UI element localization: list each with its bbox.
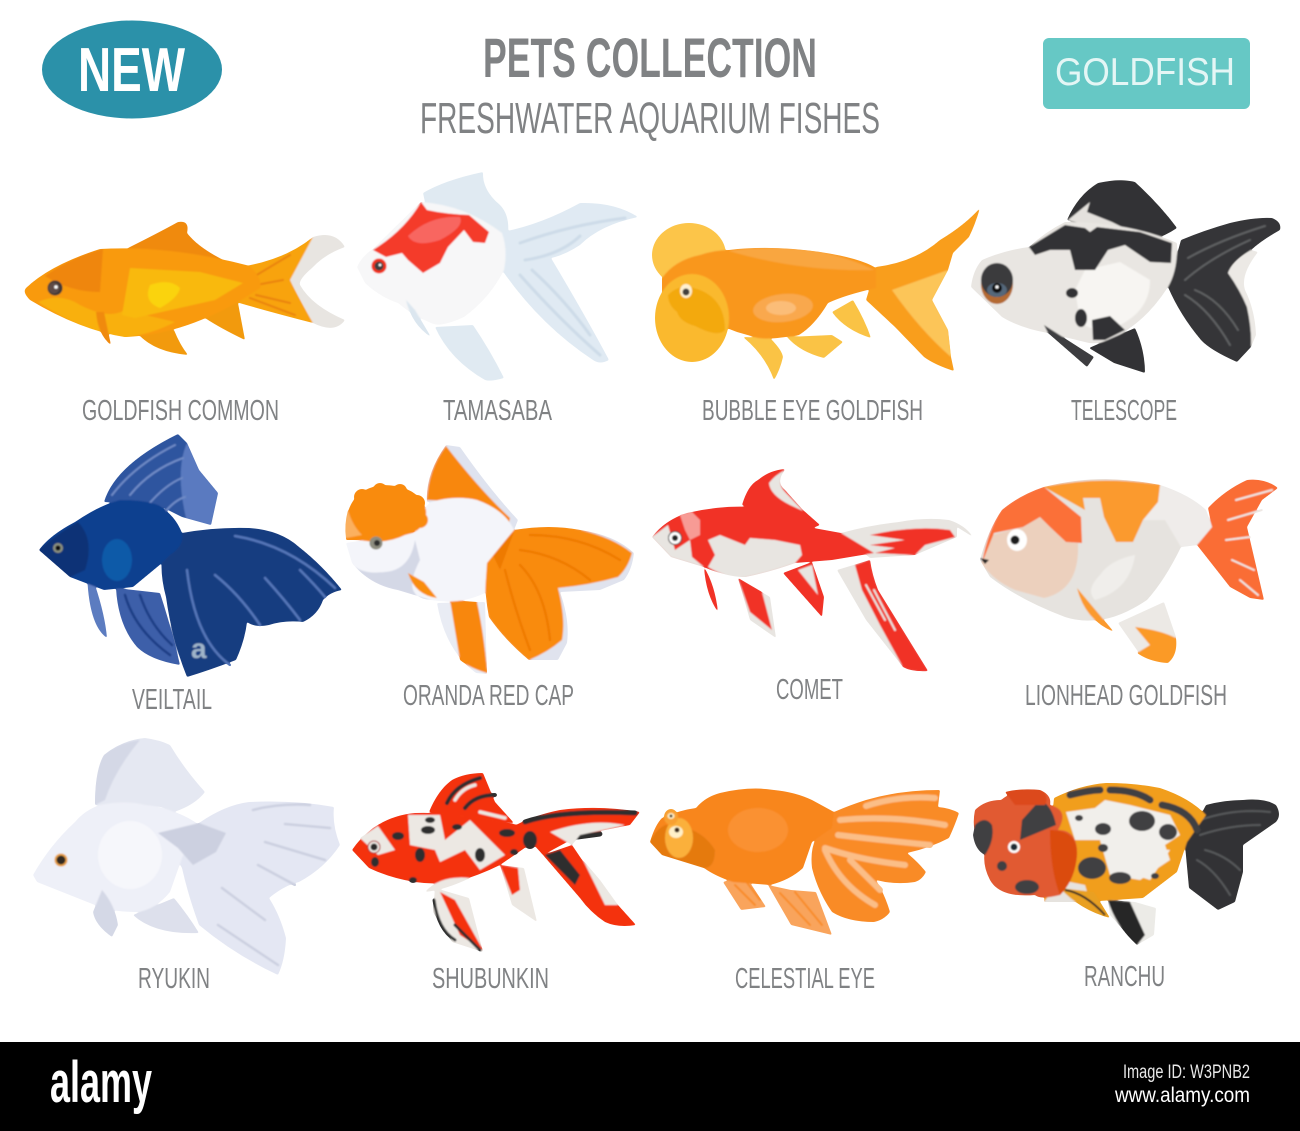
fish: tamasaba (357, 172, 638, 381)
panel: veiltail (39, 434, 342, 716)
fish: celestial eye (650, 789, 959, 935)
fish: telescope (971, 180, 1280, 373)
fish: ranchu (973, 783, 1279, 945)
label: BUBBLE EYE GOLDFISH (702, 395, 923, 427)
image id: Image ID: W3PNB2 (1123, 1062, 1250, 1083)
panel: goldfish common (25, 222, 345, 427)
badge: GOLDFISH: GOLDFISH (1055, 51, 1235, 94)
badge: NEW (42, 20, 222, 118)
label: GOLDFISH COMMON (82, 395, 279, 427)
label: RANCHU (1084, 961, 1165, 993)
fish: veiltail (39, 434, 342, 677)
subtitle: FRESHWATER AQUARIUM FISHES (420, 94, 880, 143)
badge: NEW: NEW (78, 36, 185, 105)
label: SHUBUNKIN (432, 963, 549, 995)
label: COMET (776, 674, 843, 706)
panel: telescope (971, 180, 1280, 427)
panel: oranda red cap (345, 445, 634, 712)
label: VEILTAIL (132, 684, 212, 716)
label: CELESTIAL EYE (735, 963, 875, 995)
fish: oranda red cap (345, 445, 634, 674)
label: RYUKIN (138, 963, 210, 995)
label: TELESCOPE (1071, 395, 1177, 427)
fish: bubble eye goldfish (652, 208, 980, 380)
panel: bubble eye goldfish (652, 208, 980, 427)
label: ORANDA RED CAP (403, 680, 574, 712)
panel: tamasaba (357, 172, 638, 427)
panel: comet (652, 469, 973, 706)
footer bar (0, 1042, 1300, 1131)
panel: lionhead goldfish (980, 479, 1278, 712)
label: TAMASABA (443, 395, 552, 427)
fish: goldfish common (25, 222, 345, 355)
fish: comet (652, 469, 973, 671)
logo: alamy: alamy (50, 1050, 152, 1115)
fish: lionhead goldfish (980, 479, 1278, 663)
panel: shubunkin (352, 773, 640, 995)
website: www.alamy.com (1114, 1084, 1250, 1107)
badge: GOLDFISH (1043, 38, 1250, 109)
watermark: a (191, 633, 207, 664)
panel: ryukin (33, 738, 340, 995)
panel: ranchu (973, 783, 1279, 993)
title: PETS COLLECTION (483, 26, 817, 89)
fish: shubunkin (352, 773, 640, 952)
panel: celestial eye (650, 789, 959, 995)
fish: ryukin (33, 738, 340, 975)
